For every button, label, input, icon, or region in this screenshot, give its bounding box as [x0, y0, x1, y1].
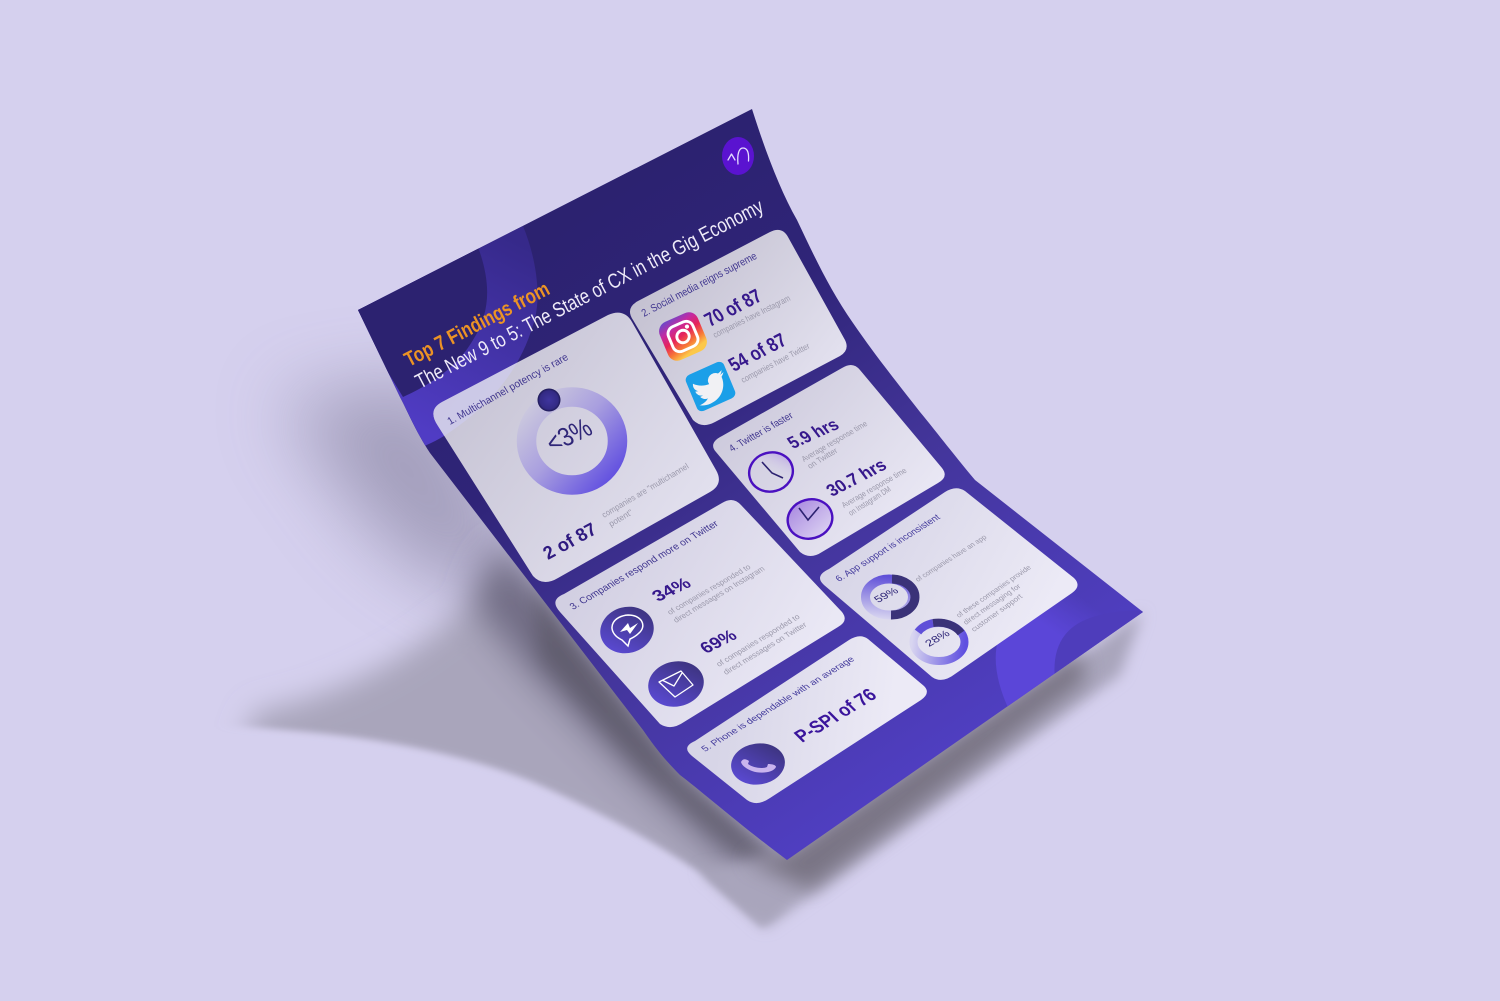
- stat 30.7 hrs: Average response time: [840, 466, 908, 509]
- stat 69%: of companies responded to: [714, 612, 801, 668]
- stat 30.7 hrs: 30.7 hrs: [823, 456, 891, 501]
- stat 5.9 hrs: [784, 416, 869, 470]
- stat twitter: companies have Twitter: [739, 341, 811, 385]
- stat 34%: [648, 563, 766, 624]
- donut 28% caption: of these companies provide: [954, 563, 1033, 619]
- panel: 4 twitter is faster: [713, 365, 945, 556]
- stat 5.9 hrs: on Twitter: [806, 446, 839, 470]
- stat 2 of 87: 2 of 87: [540, 520, 601, 564]
- panel 1 heading: 1. Multichannel potency is rare: [446, 352, 570, 427]
- donut 28%: 28%: [922, 628, 952, 649]
- header ring decoration: [350, 226, 538, 452]
- stat 30.7 hrs: [823, 456, 908, 517]
- stat 34%: direct messages on Instagram: [671, 564, 766, 624]
- donut chart: [526, 388, 618, 485]
- panel: 5 phone: [687, 636, 927, 803]
- paper shadow: [240, 380, 1143, 945]
- icon: messenger: [595, 601, 659, 659]
- icon: twitter: [684, 360, 737, 413]
- icon: clock 30.7 hrs: [783, 494, 837, 544]
- panel: 6 app support: [820, 488, 1078, 680]
- stat 34%: of companies responded to: [665, 563, 752, 616]
- footer corner decoration: [996, 599, 1143, 706]
- donut value: <3%: [540, 413, 598, 458]
- donut 59%: 59%: [871, 585, 901, 605]
- stat description: [600, 462, 690, 529]
- donut 28% caption: customer support: [969, 592, 1024, 633]
- donut 28% caption: [954, 563, 1033, 633]
- stat 5.9 hrs: Average response time: [800, 419, 869, 463]
- stat instagram: [701, 285, 792, 340]
- panel 6 heading: 6. App support is inconsistent: [834, 513, 942, 584]
- icon: logo: [722, 137, 754, 175]
- panel 2 heading: 2. Social media reigns supreme: [640, 250, 759, 319]
- stat instagram: 70 of 87: [701, 285, 766, 331]
- title: The New 9 to 5: The State of CX in the Gig Economy: [411, 194, 767, 393]
- panel: 1 multichannel: [433, 312, 719, 582]
- stat P-SPI: P-SPI of 76: [789, 684, 881, 746]
- icon: phone: [728, 740, 788, 788]
- donut 28%: [914, 623, 964, 661]
- stat 30.7 hrs: on Instagram DM: [847, 485, 893, 517]
- donut 28% caption: direct messaging for: [961, 582, 1022, 626]
- panel 5 heading: 5. Phone is dependable with an average: [699, 655, 857, 754]
- stat 34%: 34%: [648, 574, 696, 605]
- title: [400, 194, 767, 393]
- donut 59% caption: of companies have an app: [913, 533, 988, 583]
- stat instagram: companies have Instagram: [711, 293, 792, 340]
- title: Top 7 Findings from: [400, 277, 553, 371]
- icon: clock 5.9 hrs: [745, 447, 797, 497]
- stat twitter: 54 of 87: [725, 330, 791, 376]
- poster sheet: [350, 109, 1150, 860]
- stat description: potent": [607, 508, 634, 529]
- stat 69%: 69%: [696, 626, 741, 657]
- icon: envelope: [644, 656, 708, 712]
- panel 3 heading: 3. Companies respond more on Twitter: [568, 519, 721, 612]
- stat 69%: [696, 612, 808, 676]
- stat description: companies are "multichannel: [600, 462, 690, 520]
- icon: instagram: [656, 309, 710, 364]
- panel 4 heading: 4. Twitter is faster: [727, 411, 796, 454]
- stat 69%: direct messages on Twitter: [721, 620, 808, 676]
- donut 59%: [866, 579, 915, 615]
- panel: 3 companies respond: [555, 500, 845, 727]
- panel: 2 social media: [630, 230, 847, 425]
- stat 5.9 hrs: 5.9 hrs: [784, 416, 843, 453]
